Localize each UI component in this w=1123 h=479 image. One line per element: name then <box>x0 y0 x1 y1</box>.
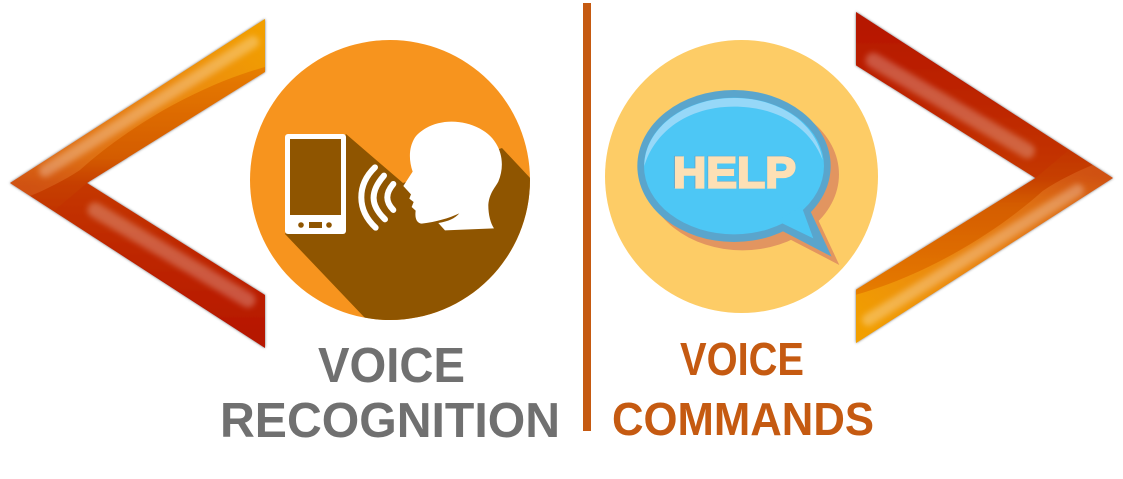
icon: sound waves <box>361 167 393 228</box>
help text face: HELP <box>673 148 796 198</box>
voice recognition icon: orange circle <box>250 40 530 320</box>
voice commands icon: yellow circle <box>605 40 878 313</box>
heading: voice recognition: VOICE <box>318 339 465 393</box>
right chevron arrow <box>856 12 1113 343</box>
heading: voice recognition: RECOGNITION <box>220 394 560 448</box>
help text shadow: HELP <box>672 148 796 197</box>
heading: voice commands <box>612 333 874 445</box>
heading: voice recognition <box>220 339 560 448</box>
icon: speaking head <box>403 122 502 230</box>
heading: voice commands: VOICE <box>680 333 804 385</box>
speech bubble <box>637 90 839 265</box>
left chevron arrow <box>10 19 265 348</box>
divider line <box>583 3 591 431</box>
long shadow <box>285 134 530 320</box>
heading: voice commands: COMMANDS <box>612 393 874 445</box>
icon: phone <box>285 134 346 234</box>
